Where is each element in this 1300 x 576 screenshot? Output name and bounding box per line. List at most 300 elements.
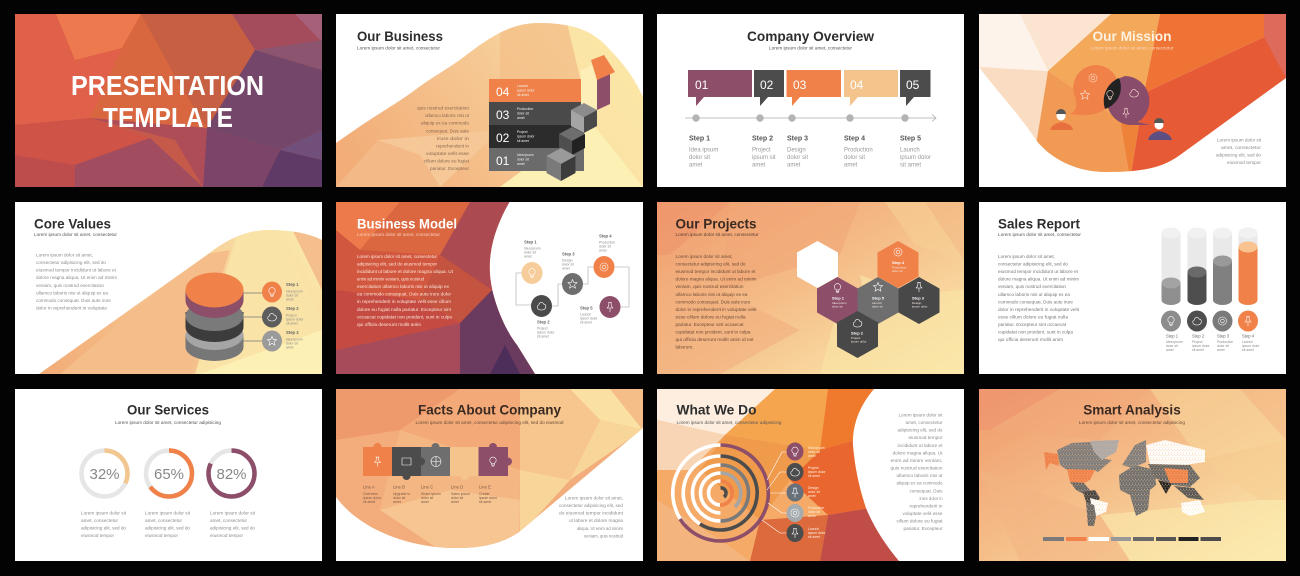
staircase rows: ipsum dolor [517,134,535,138]
item labels: amet [808,454,816,458]
heading: Our Projects [676,216,757,232]
puzzle labels: sit amet [363,500,375,504]
icon: people [1050,109,1172,140]
chart labels: dolor sit [1217,344,1229,348]
step labels [524,234,615,338]
heading: Smart Analysis [1083,402,1181,418]
text block: veniam, quis nostrud [584,534,624,538]
item labels: Idea ipsum [808,446,825,450]
puzzle labels: Share ipsum [421,492,441,496]
low-poly shape [979,14,1286,187]
panel: smart analysis: Lorem ipsum dolor sit amet, consectetur adipisicing [1079,420,1186,425]
text block: qui officia deserunt mollit anim [357,322,421,327]
text block: dolor in reprehenderit in voluptate [36,306,108,310]
step labels: dolor sit [286,294,298,298]
speech bubbles [1070,65,1150,125]
text block: incididunt ut labore et dolore magna aliqua. Ut [357,269,454,274]
text block: commodo consequat. Duis aute irure [998,299,1074,304]
staircase rows: amet [517,116,525,120]
text block [36,252,117,310]
hexagon cluster: ipsum dolor [851,340,867,344]
chart labels [1166,334,1260,352]
panel: facts about company [336,389,643,561]
timeline arrow [685,114,936,122]
panel: our business: Lorem ipsum dolor sit amet, consectetur [357,46,441,50]
step labels: amet [286,346,294,350]
panel: what we do [657,389,964,561]
text block: dolore magna aliqua. Ut enim ad minim [36,275,117,280]
cylinder chart [1162,228,1258,305]
curved background shape [39,230,322,374]
panel: our mission: Lorem ipsum dolor sit amet, consectetur [1090,46,1174,50]
text block: consequat. Duis [910,488,942,494]
heading: Our Business [357,28,443,44]
text block: consectetur adipisicing elit, sed [559,503,624,508]
text block: dolore magna aliqua. Ut enim ad minim [998,276,1079,282]
panel: sales report [979,202,1286,374]
text block: enim ad minim veniam, quis nostrud [357,276,425,282]
chart icons [1161,310,1258,332]
step callouts [688,70,930,106]
text blocks: amet, consectetur [145,518,183,523]
step labels: dolor sit [562,262,574,266]
item labels [808,446,826,539]
text block [357,254,454,327]
concentric ring chart [673,445,768,541]
hexagon cluster: Launch [872,301,882,305]
step labels: amet [524,254,532,258]
puzzle labels: dolor sit [393,496,405,500]
heading: Facts About Company [418,402,561,418]
text block: Lorem ipsum dolor sit [1217,138,1262,142]
panel: company overview [657,14,964,187]
text block: eiusmod tempor [908,435,943,440]
chart labels: amet [1166,348,1174,352]
text block: pariatur. Excepteur sint occaecat [998,322,1067,327]
text block [417,106,470,171]
chart labels: ipsum dolor [1192,344,1210,348]
heading: Our Services [127,402,209,418]
text block: Lorem ipsum dolor sit amet, [676,254,732,259]
step labels: Step 3 [787,136,808,142]
text block: ullamco laboris nisi ut aliquip ex ea [998,292,1071,297]
text blocks: adipisicing elit, sed do [210,526,256,530]
text block: incididunt ut labore et [898,443,943,448]
panel: smart analysis [979,389,1286,561]
step labels: Step 1 [689,136,710,142]
staircase rows: dolor sit [517,112,529,116]
chart labels: ipsum dolor [1242,344,1260,348]
text block [890,412,943,531]
text block: qui officia deserunt mollit anim [998,337,1063,342]
chart labels: Launch [1242,340,1253,344]
item labels: Design [808,486,819,490]
hexagon cluster [797,241,940,358]
hexagon cluster: Idea ipsum [832,301,847,305]
staircase rows [489,79,584,171]
step labels: Step 1 [524,240,537,244]
item labels: ipsum dolor [808,470,826,474]
panel: core values: Lorem ipsum dolor sit amet, consectetur [34,232,118,237]
text block: dolor in reprehenderit in voluptate velit [998,307,1080,312]
white curved panel [853,389,964,561]
text blocks: eiusmod tempor [81,533,115,538]
text block: do eiusmod tempor incididunt [559,510,624,516]
text block: Lorem ipsum dolor sit amet, [998,254,1055,259]
staircase rows: ipsum dolor [517,88,535,92]
puzzle labels: Overview [363,492,378,496]
puzzle labels [363,484,498,504]
heading: Company Overview [747,28,874,44]
step labels: dolor sit [286,342,298,346]
step labels: sit amet [286,322,298,326]
hexagon cluster: dolor sit [892,269,903,273]
text block: ullamco laboris nisi ut [896,473,943,478]
staircase rows: Idea ipsum [517,153,534,157]
hexagon cluster: Step 2 [851,330,864,336]
step labels: Launch [900,148,920,154]
heading: Sales Report [998,216,1080,232]
puzzle labels: amet [393,500,401,504]
item labels: ipsum dolor [808,531,826,535]
chart labels: dolor sit [1166,344,1178,348]
hexagon cluster: Design [912,301,922,305]
step labels: Project [752,148,771,154]
heading: Core Values [34,216,111,232]
text block: cupidatat non proident, sunt in culpa [676,330,751,334]
title text: PRESENTATION [71,70,264,101]
chart labels: sit amet [1192,348,1204,352]
puzzle labels: sit amet [479,500,491,504]
chart labels: amet [1217,348,1225,352]
step labels: ipsum dolor [537,330,555,334]
text block: pariatur. Excepteur sint occaecat [676,322,744,327]
text block [1216,138,1262,165]
puzzle labels: Line B [393,484,405,490]
panel: company overview: Lorem ipsum dolor sit amet, consectetur [769,46,853,50]
step labels: amet [599,248,607,252]
hexagon cluster: ipsum dolor [912,304,928,308]
donut values: 32% [89,466,120,483]
step labels: sit amet [900,162,921,168]
text block: eiusmod tempor incididunt ut labore et [36,268,117,272]
text block: Lorem ipsum dolor sit [898,412,943,418]
puzzle labels: dolor sit [421,496,433,500]
text block: cillum dolore eu fugiat [424,158,470,164]
step labels: Step 5 [580,306,593,310]
curved background shape [336,389,643,561]
puzzle labels: Line C [421,484,433,490]
step labels: Idea ipsum [286,338,303,342]
step labels: ipsum dolor [580,316,598,320]
chart labels: Idea ipsum [1166,340,1183,344]
donut values [89,466,247,483]
text block: occaecat cupidatat non proident, sunt in culpa [357,314,453,320]
step labels: ipsum sit [752,155,776,161]
puzzle labels: ipsum dolor [363,496,382,500]
puzzle labels: amet [421,500,429,504]
step labels: Step 1 [286,282,299,287]
text block: amet, consectetur [906,420,943,425]
bubble icons [1080,74,1138,118]
text block: veniam, quis nostrud exercitation [36,283,105,288]
text block: in reprehenderit in voluptate velit esse cillum [357,299,451,304]
text blocks [81,510,256,538]
text block: consectetur adipisicing elit, sed do [676,262,746,266]
step labels: Step 4 [599,234,612,238]
title text [71,70,264,133]
hexagon cluster: Step 3 [912,296,925,300]
step icons [243,282,282,352]
text block: adipisicing elit, sed do [898,428,943,432]
step callouts: 03 [793,78,807,92]
step labels: amet [844,162,858,168]
low-poly background [657,202,964,374]
stacked disc chart [186,272,244,361]
text block: adipisicing elit, sed do eiusmod tempor [357,262,438,266]
staircase rows: amet [517,162,525,166]
hex dot world map [1044,440,1205,526]
text block: cillum dolore eu fugiat [896,518,943,524]
text block: commodo consequat. Duis aute irure [676,299,751,304]
item labels: sit amet [808,474,820,478]
text blocks: eiusmod tempor [145,533,179,538]
hexagon cluster: dolor sit [832,304,843,308]
panel: business model: Lorem ipsum dolor sit amet, consectetur [357,232,441,237]
item labels: amet [808,494,816,498]
step labels: amet [286,298,294,302]
step labels: dolor sit [599,244,611,248]
hexagon cluster: dolor sit [872,304,883,308]
text block: ullamco laboris nisi ut aliquip ex ea [36,290,109,296]
text block: laborum. [676,344,694,350]
hexagon cluster: Step 4 [892,260,905,265]
step labels: dolor sit [844,155,865,161]
text block [676,254,757,350]
step callouts: 04 [850,78,864,92]
step labels: Step 3 [286,330,299,335]
staircase rows: 03 [496,108,510,122]
text blocks: eiusmod tempor [210,533,244,538]
step labels: amet [562,266,570,270]
text block: veniam, quis nostrud exercitation [676,284,744,289]
panel: our projects [657,202,964,374]
text block: pariatur. Excepteur [430,166,470,171]
step labels: Project [537,326,548,330]
step labels: Step 4 [844,136,865,142]
step labels: Idea ipsum [689,148,718,154]
text block: reprehenderit in [436,144,470,148]
panel: our projects: Lorem ipsum dolor sit amet, consectetur [676,232,759,237]
text block: adipisicing elit, sed do [1216,152,1262,158]
step labels: Design [562,258,573,262]
text blocks: adipisicing elit, sed do [145,526,191,530]
chart labels: Step 4 [1242,334,1255,338]
step labels: ipsum dolor [900,155,931,161]
panel: our mission [979,14,1286,187]
panel: what we do: Lorem ipsum dolor sit amet, consectetur adipisicing [676,420,782,425]
panel: business model [336,202,643,374]
step labels: Idea ipsum [286,290,303,294]
text block: dolor in reprehenderit in voluptate velit [676,307,757,312]
panel: our business [336,14,643,187]
text block: eiusmod tempor incididunt ut labore et [998,269,1079,274]
text block: Lorem ipsum dolor sit amet, [565,496,623,500]
step callouts: 01 [695,78,709,92]
panel: title slide [15,14,322,187]
flow diagram [516,256,629,318]
text block: dolore magna aliqua. Ut enim ad minim [676,276,757,282]
text block: quis nostrud exercitation [890,466,943,470]
text block: irure dolor in [920,496,943,501]
step labels: Project [286,314,297,318]
text blocks: Lorem ipsum dolor sit [81,510,127,516]
step labels: Step 2 [537,320,550,324]
chart labels: Production [1217,340,1233,344]
staircase rows: Project [517,130,528,134]
text block: Lorem ipsum dolor sit amet, [36,252,93,258]
text block: ut labore et dolore magna [569,518,624,523]
step labels: dolor sit [689,155,710,161]
step labels: amet [752,162,766,168]
chart labels: Project [1192,340,1203,344]
text block: commodo consequat. Duis aute irure [36,298,112,303]
puzzle labels: Line E [479,484,491,490]
step labels: Step 2 [752,136,773,142]
panel: our services [15,389,322,561]
donut values: 65% [154,466,184,483]
curved background shape [336,14,643,187]
item icons [786,442,804,542]
low-poly shape [336,202,540,374]
donut values: 82% [216,466,247,483]
step labels: dolor sit [787,155,808,161]
text block: ullamco laboris nisi ut aliquip ex ea [676,292,748,297]
staircase rows: 01 [496,154,510,168]
item labels: amet [808,514,816,518]
title text: TEMPLATE [103,102,233,133]
puzzle labels: Create [479,492,490,496]
text blocks: Lorem ipsum dolor sit [145,510,191,516]
heading: Business Model [357,216,457,232]
staircase rows: sit amet [517,93,529,97]
step labels: amet [689,162,703,168]
text block: eiusmod tempor [1227,160,1262,165]
staircase rows: dolor sit [517,158,529,162]
step labels: ipsum dolor [286,318,304,322]
text blocks: amet, consectetur [210,518,248,523]
text block: consequat. Duis aute [426,128,470,134]
low-poly background [15,14,322,187]
puzzle labels: Line A [363,484,375,490]
heading: What We Do [676,402,756,418]
text block: amet, consectetur [1221,145,1262,150]
step labels [689,136,931,168]
text block: esse cillum dolore eu fugiat nulla [998,314,1069,320]
donut charts [82,450,254,496]
text block: pariatur. Excepteur [904,526,943,531]
panel: facts about company: Lorem ipsum dolor sit amet, consectetur adipisicing elit, sed do eiusmod [416,420,564,425]
text block: cupidatat non proident, sunt in culpa [998,330,1074,334]
text block: qui officia deserunt mollit anim id est [676,337,754,342]
step labels: sit amet [580,320,592,324]
step labels: Production [599,240,615,244]
chart labels: Step 1 [1166,334,1179,338]
text block: quis nostrud exercitation [417,106,470,110]
isometric cubes and arrow [546,55,615,181]
puzzle labels: ipsum dolor [479,496,498,500]
step labels: Production [844,148,873,154]
text block: enim ad minim veniam, [890,458,942,463]
step labels [286,282,304,350]
item labels: dolor sit [808,490,820,494]
puzzle labels: Upgrade in [393,492,410,496]
low-poly background [979,389,1286,561]
text block: aliqua. Ut enim ad minim [577,526,623,531]
text block: dolore eu fugiat nulla pariatur. Excepteur sint [357,307,452,312]
chart labels: Step 2 [1192,334,1205,338]
item labels: Launch [808,527,819,531]
staircase rows: 02 [496,131,510,145]
hexagon cluster: Step 1 [832,296,845,300]
item labels: dolor sit [808,450,820,454]
text block [559,496,624,538]
text blocks: Lorem ipsum dolor sit [210,510,256,516]
step labels: Step 3 [562,252,575,256]
panel: core values [15,202,322,374]
text block: aliquip ex ea commodo [421,120,470,126]
chart labels: Step 3 [1217,334,1230,338]
item labels: sit amet [808,535,820,539]
step labels: Idea ipsum [524,246,541,250]
step labels: sit amet [537,334,549,338]
step callouts: 02 [760,78,774,92]
text blocks: adipisicing elit, sed do [81,526,127,530]
text block: esse cillum dolore eu fugiat nulla [676,314,746,320]
step labels: Design [787,148,806,154]
step labels: dolor sit [524,250,536,254]
text block: veniam, quis nostrud exercitation [998,284,1067,289]
panel: our services: Lorem ipsum dolor sit amet, consectetur adipisicing [115,420,222,425]
text block: voluptate velit esse [902,511,943,516]
connector lines [762,452,787,533]
hexagon cluster: Project [851,336,861,340]
hexagon cluster: Production [892,266,907,270]
step labels: Launch [580,312,591,316]
step labels: Step 2 [286,306,299,311]
low-poly background [657,389,899,561]
text block: Lorem ipsum dolor sit amet, consectetur [357,254,438,259]
step callouts: 05 [906,78,920,92]
text block [998,254,1080,342]
text block: dolore magna aliqua. Ut [892,450,943,456]
text block: voluptate velit esse [426,151,470,156]
hexagon cluster: Step 5 [872,296,885,300]
text blocks: amet, consectetur [81,518,119,523]
panel: sales report: Lorem ipsum dolor sit amet, consectetur [998,232,1082,237]
chart labels: sit amet [1242,348,1254,352]
puzzle infographic [363,443,512,480]
step labels: amet [787,162,801,168]
step labels: Step 5 [900,136,921,142]
staircase rows: 04 [496,85,510,99]
staircase rows: Production [517,107,533,111]
staircase rows: sit amet [517,139,529,143]
text block: irure dolor in [437,136,470,141]
text block: aliquip ex ea commodo [896,480,943,486]
heading: Our Mission [1092,28,1172,44]
item labels: dolor sit [808,510,820,514]
